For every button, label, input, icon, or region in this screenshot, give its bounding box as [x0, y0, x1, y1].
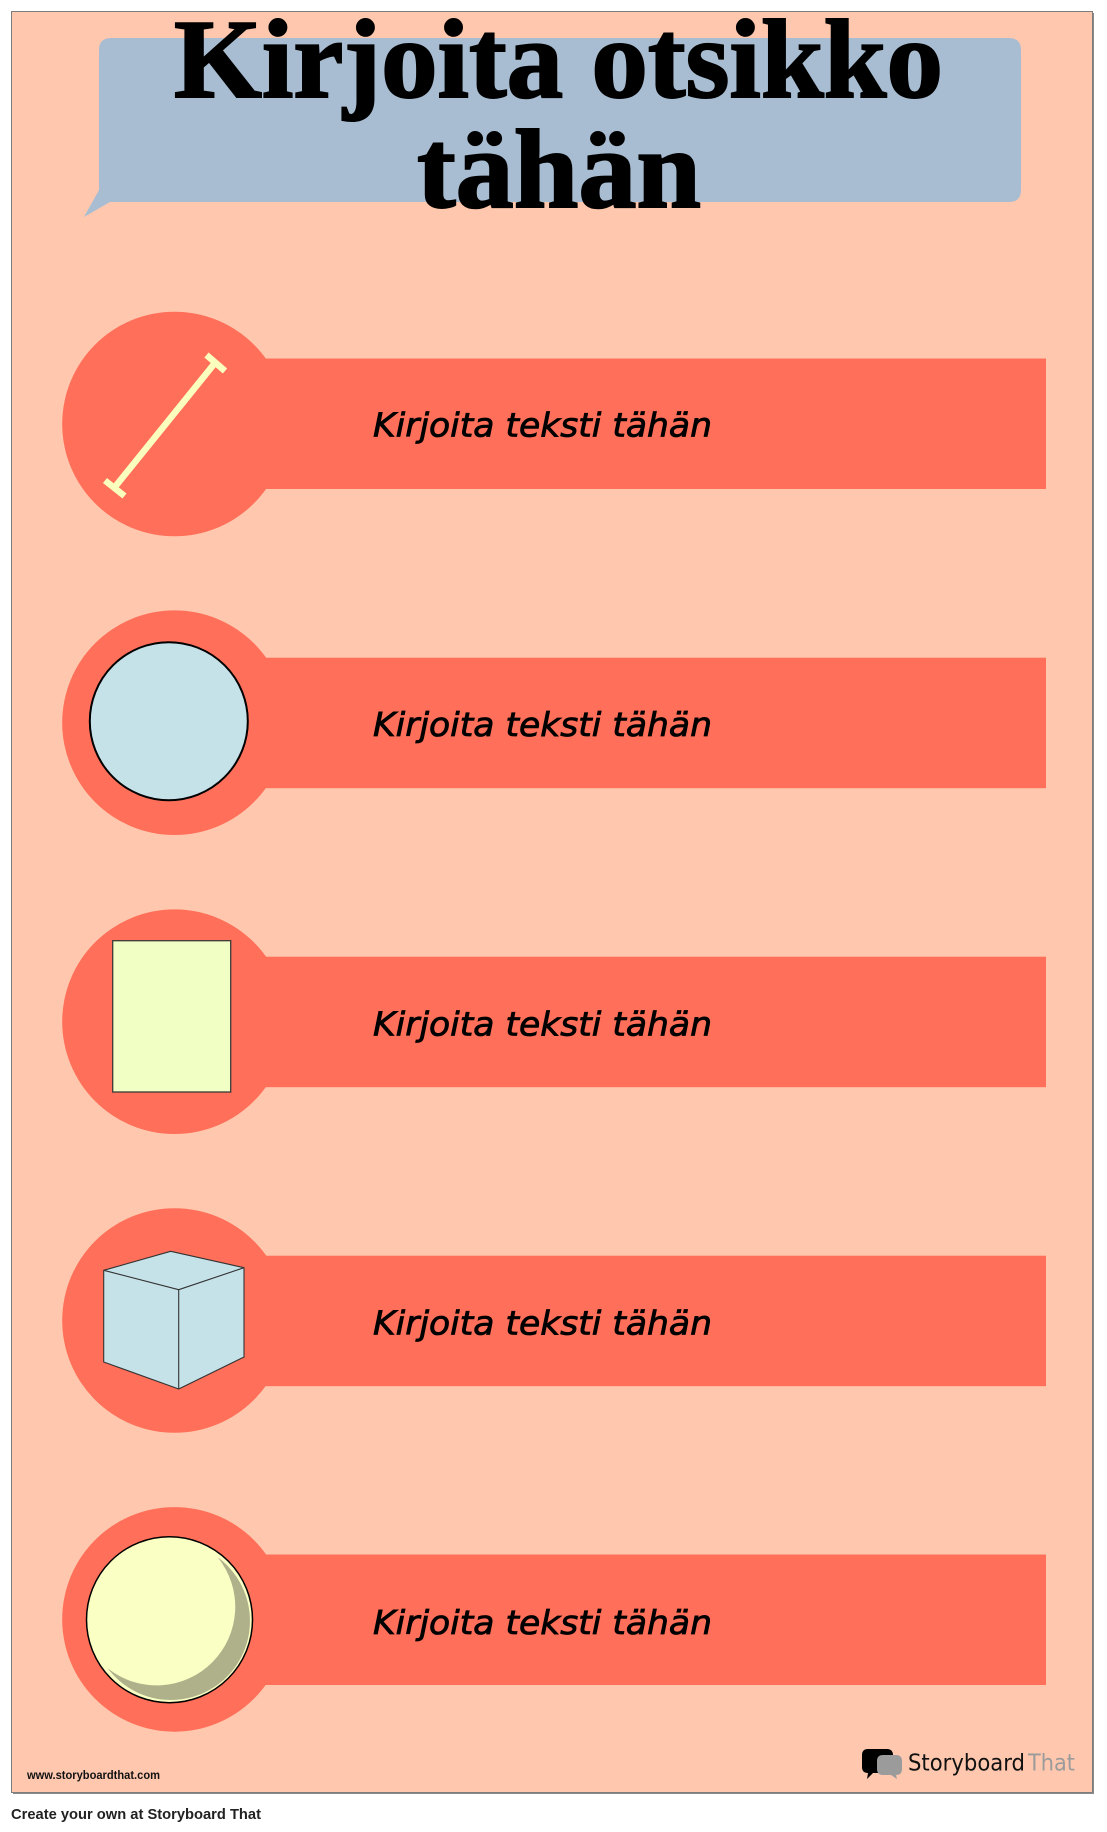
website url: www.storyboardthat.com [26, 1768, 160, 1782]
row 5: sphere [62, 1507, 1046, 1732]
row 5 banner [62, 1507, 1046, 1732]
icon: sphere [86, 1537, 252, 1703]
icon: cube [104, 1251, 244, 1389]
logo wordmark: Storyboard [908, 1751, 1025, 1777]
row 2 banner [62, 610, 1046, 835]
icon: flat circle [90, 642, 248, 800]
row 1: line segment [62, 312, 1046, 536]
title: Kirjoita otsikko [174, 0, 943, 122]
row 3 banner [62, 909, 1046, 1134]
icon: line segment [105, 355, 225, 496]
icon: rectangle [113, 941, 231, 1092]
row 3 text: Kirjoita teksti tähän [373, 1004, 712, 1043]
row 4: cube [62, 1208, 1046, 1433]
row 2: circle [62, 610, 1046, 835]
logo: Storyboard That [862, 1749, 1075, 1779]
logo wordmark: That [1027, 1751, 1075, 1777]
row 5 text: Kirjoita teksti tähän [373, 1603, 712, 1642]
speech bubble [84, 38, 1021, 217]
title [174, 0, 943, 232]
row 1 text: Kirjoita teksti tähän [373, 406, 712, 445]
footer credit: Create your own at Storyboard That [11, 1806, 261, 1823]
title: tähän [417, 108, 701, 232]
row 3: rectangle [62, 909, 1046, 1134]
row 1 banner [62, 312, 1046, 536]
row 4 text: Kirjoita teksti tähän [373, 1304, 712, 1343]
row 4 banner [62, 1208, 1046, 1433]
logo icon: speech bubbles [862, 1749, 902, 1779]
row 2 text: Kirjoita teksti tähän [373, 705, 712, 744]
